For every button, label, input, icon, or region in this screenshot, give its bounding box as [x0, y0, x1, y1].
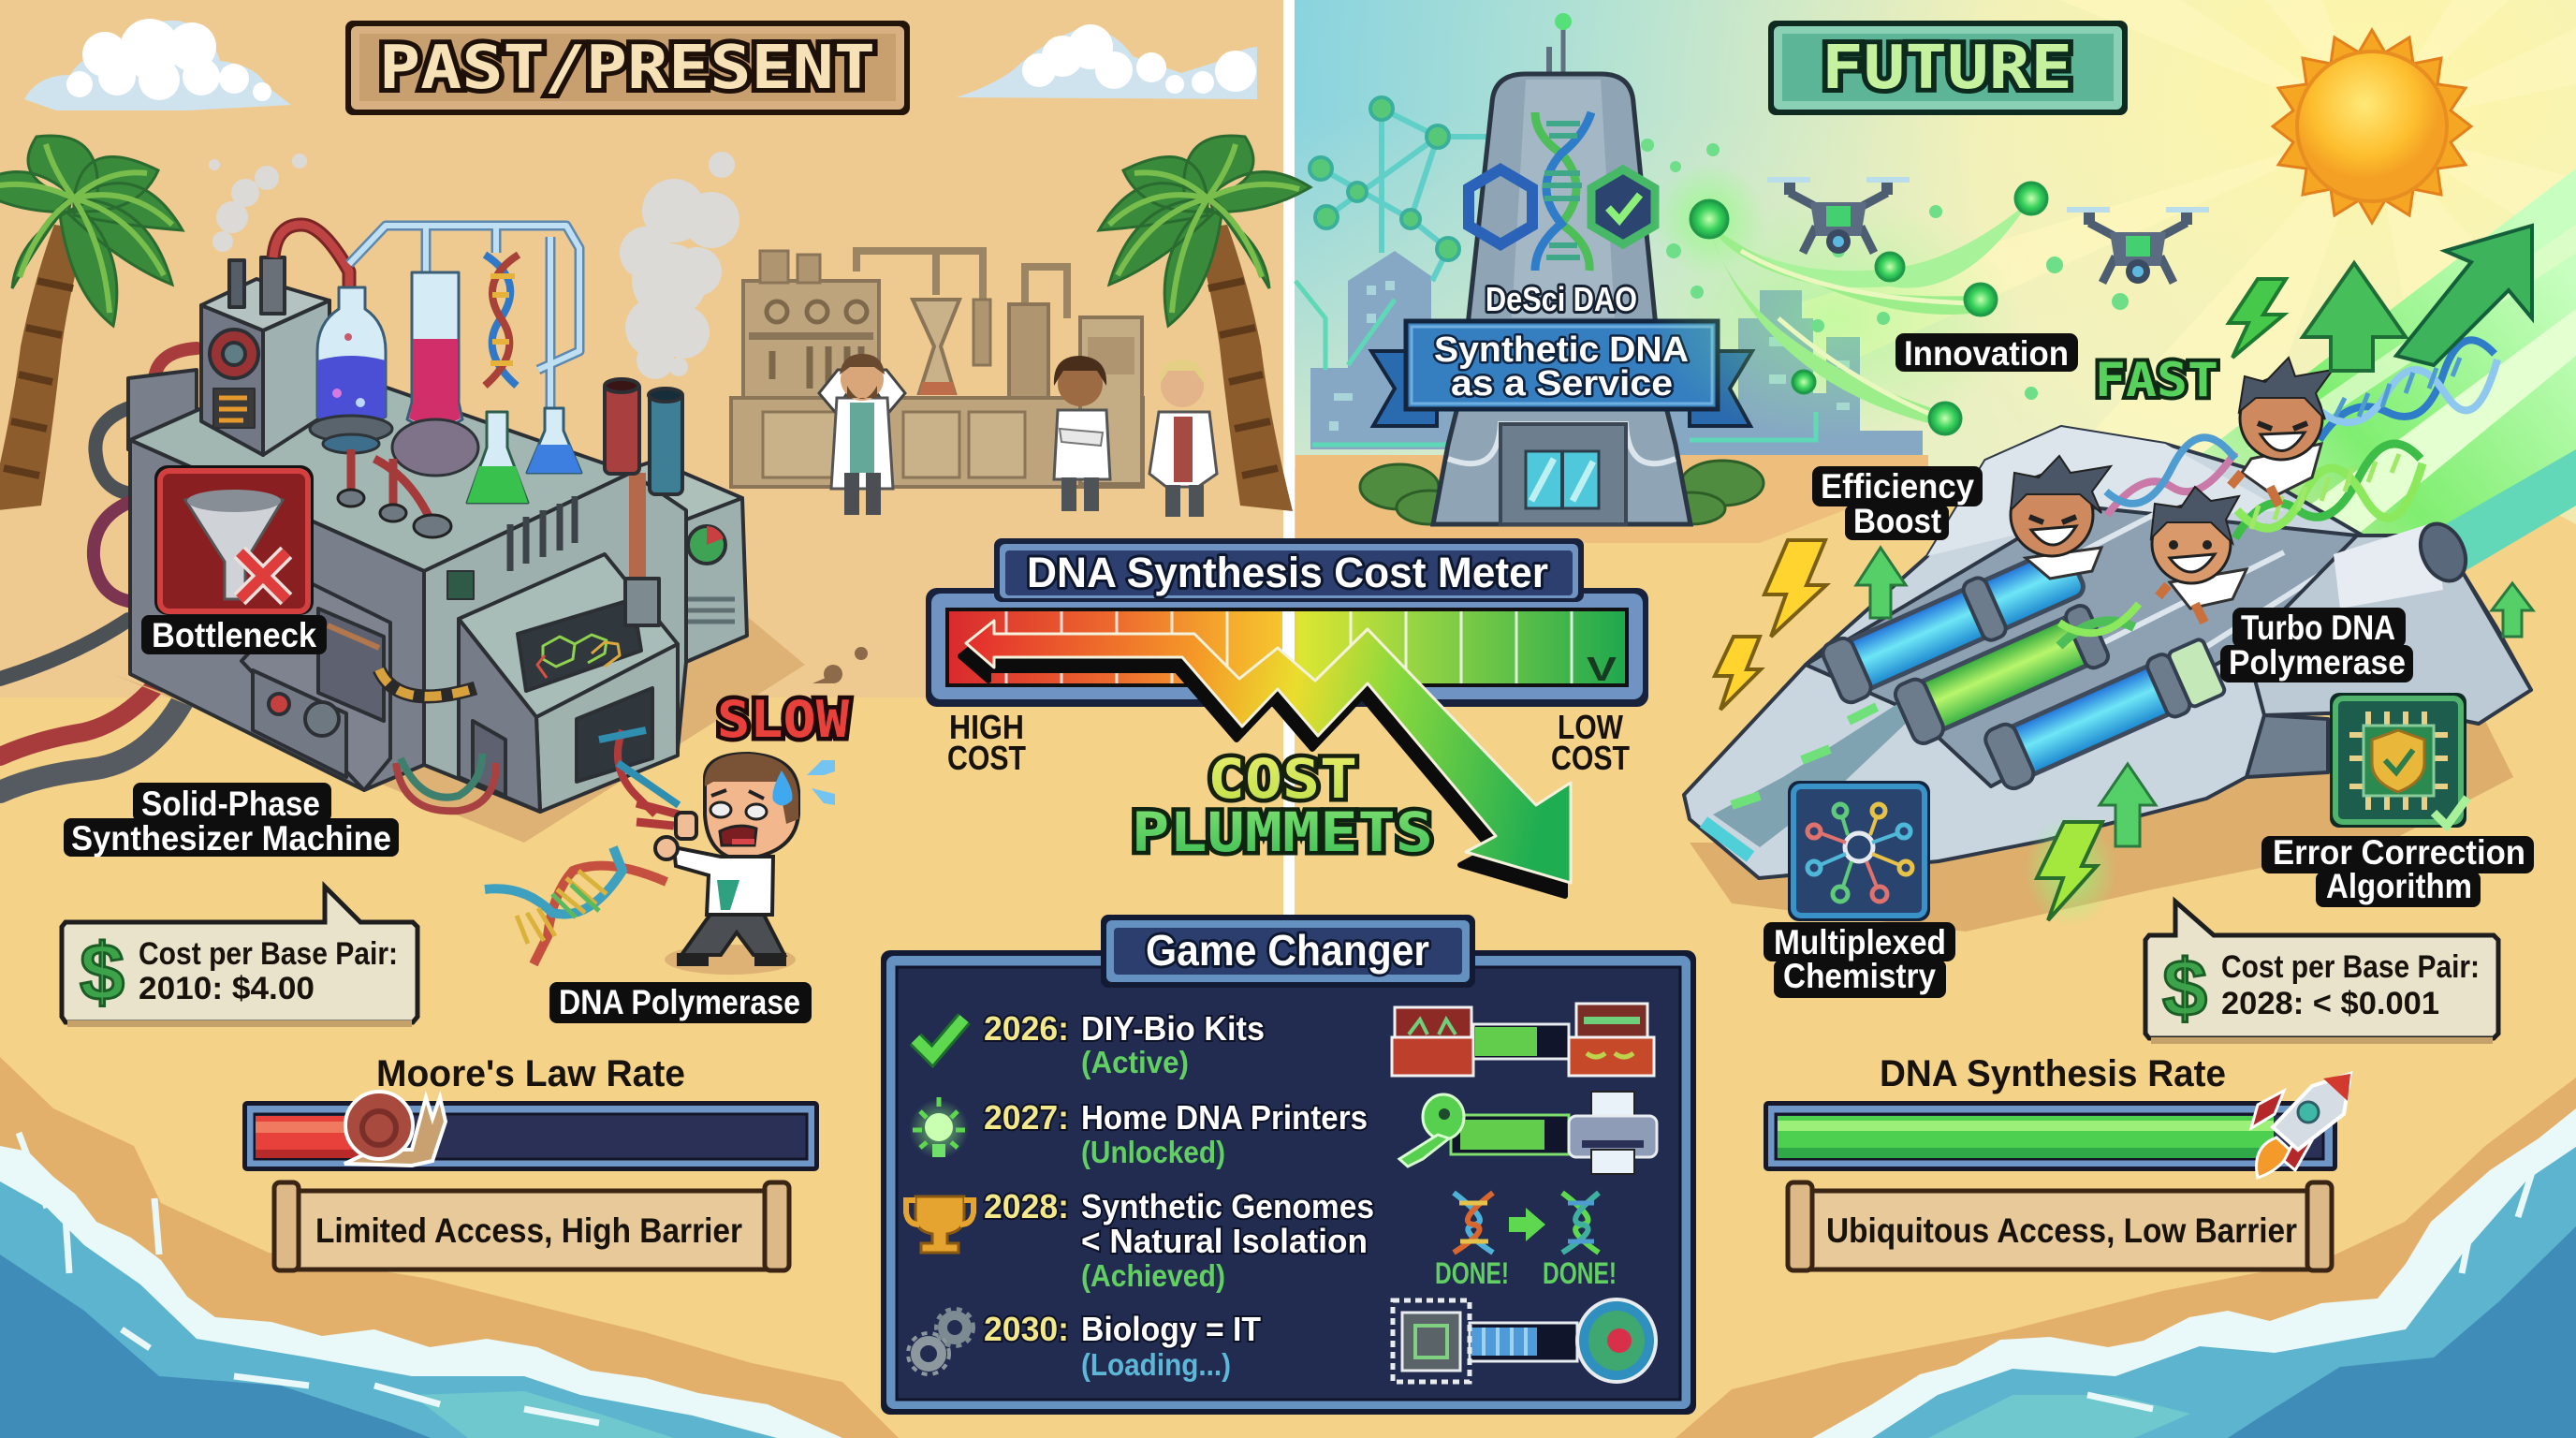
label: Solid-Phase Synthesizer Machine	[64, 783, 399, 858]
bushes	[1360, 461, 1764, 524]
icon: DNA and hexagons on tower	[1469, 112, 1655, 271]
panel: DNA synthesis cost meter	[926, 538, 1648, 707]
palm tree right	[1099, 136, 1310, 511]
scientist hands on head	[819, 354, 905, 515]
row 2026: (Active)	[1081, 1045, 1189, 1079]
heading plate: PAST/PRESENT: PAST/PRESENT	[379, 34, 875, 103]
label: Turbo DNA Polymerase: Turbo DNA	[2241, 609, 2395, 647]
label: LOW COST: COST	[1551, 739, 1630, 777]
row 2027: 2027:	[984, 1098, 1069, 1137]
heading plate: PAST/PRESENT	[345, 21, 910, 115]
label: Solid-Phase Synthesizer Machine: Solid-Phase	[141, 785, 320, 823]
divider between past and future	[1283, 0, 1295, 946]
label: HIGH COST	[947, 708, 1026, 777]
row 2028: Synthetic Genomes	[1081, 1187, 1374, 1225]
label: Multiplexed Chemistry	[1764, 922, 1955, 998]
banner: Synthetic DNA as a Service	[1371, 321, 1752, 426]
DNA strand being dragged	[485, 847, 666, 964]
cloud left	[24, 19, 291, 110]
label: SLOW: SLOW	[717, 690, 850, 749]
background: future sky	[1288, 0, 2576, 1438]
banner: Synthetic DNA as a Service: Synthetic DNA	[1434, 330, 1689, 370]
label: Multiplexed Chemistry: Chemistry	[1783, 957, 1936, 995]
steam clouds	[209, 152, 739, 379]
label: Error Correction Algorithm: Error Correction	[2273, 833, 2525, 872]
scientist arms crossed	[1054, 356, 1110, 511]
icon: error correction chip	[2330, 693, 2467, 828]
data network nodes	[1310, 97, 1488, 281]
icon: multiplexed chemistry	[1788, 781, 1930, 921]
row 2027: Home DNA Printers	[1081, 1098, 1368, 1137]
row 2028: < Natural Isolation	[1081, 1222, 1368, 1260]
scroll: Limited Access, High Barrier: Limited Access, High Barrier	[315, 1211, 742, 1250]
heading: COST PLUMMETS: COST	[1208, 747, 1357, 811]
arrow: plummeting cost	[960, 621, 1571, 896]
city skyline	[1295, 251, 1923, 455]
callout: cost per base pair 2028	[2145, 902, 2498, 1044]
row 2026	[915, 1004, 1654, 1079]
scroll: Ubiquitous Access, Low Barrier: Ubiquitous Access, Low Barrier	[1826, 1211, 2297, 1250]
icon: yellow lightning large	[1764, 540, 1826, 637]
row 2027	[909, 1092, 1657, 1174]
meter tab title	[994, 538, 1584, 602]
callout: cost per base pair 2028: Cost per Base Pair:	[2221, 949, 2480, 985]
banner: Synthetic DNA as a Service: as a Service	[1451, 364, 1673, 404]
tab: Game Changer title	[1101, 915, 1475, 988]
icons: DNA to DNA done	[1454, 1193, 1599, 1253]
scroll: Ubiquitous Access, Low Barrier	[1788, 1182, 2332, 1270]
label: Turbo DNA Polymerase	[2220, 608, 2413, 682]
callout: cost per base pair 2010	[62, 887, 417, 1027]
label: Error Correction Algorithm: Algorithm	[2326, 867, 2472, 905]
callout: cost per base pair 2010: 2010: $4.00	[139, 971, 315, 1006]
progress bar: DNA synthesis rate	[1764, 1101, 2337, 1171]
scared scientist pulling DNA	[637, 754, 835, 975]
background: right shoreline and water	[1676, 1078, 2576, 1438]
background: past sand	[0, 0, 1288, 1438]
icons: chip to cell progress	[1393, 1299, 1656, 1382]
ship tube blue top	[1820, 539, 2089, 706]
progress bar: Moore's Law rate	[242, 1101, 819, 1171]
heading: COST PLUMMETS: PLUMMETS	[1132, 800, 1433, 864]
row 2030: (Loading...)	[1081, 1347, 1231, 1382]
meter scale gradient	[949, 611, 1625, 683]
character: rider back	[2231, 358, 2333, 506]
ship tube green middle	[1892, 603, 2111, 747]
sun	[2273, 30, 2471, 223]
heading plate: FUTURE: FUTURE	[1822, 34, 2072, 103]
wires from machine	[379, 669, 679, 814]
label: Innovation: Innovation	[1904, 334, 2069, 373]
arrow: large green up	[2303, 263, 2406, 371]
label: LOW COST: LOW	[1558, 708, 1623, 746]
palm tree left	[0, 136, 183, 511]
row 2030	[908, 1299, 1656, 1382]
tab: Game Changer title: Game Changer	[1146, 926, 1429, 975]
row 2028: DONE!	[1435, 1256, 1509, 1290]
meter mark V: V	[1587, 650, 1617, 688]
heading plate: FUTURE	[1768, 21, 2128, 115]
cables behind machine	[0, 348, 197, 792]
row 2026: 2026:	[984, 1009, 1069, 1048]
icon: bottleneck funnel	[154, 465, 314, 615]
row 2028: 2028:	[984, 1187, 1069, 1225]
scroll: Limited Access, High Barrier	[274, 1182, 789, 1270]
energy streams and orbs	[1641, 139, 2129, 440]
label: Turbo DNA Polymerase: Polymerase	[2229, 643, 2406, 682]
label: LOW COST	[1551, 708, 1630, 777]
arrow: green up left	[1856, 548, 1906, 618]
character: rider right	[2151, 487, 2247, 623]
small rocks on sand	[812, 647, 868, 683]
row 2030: 2030:	[984, 1310, 1069, 1348]
row 2028: (Achieved)	[1081, 1258, 1225, 1293]
drone left	[1767, 180, 1910, 254]
icon: green lightning top	[2229, 279, 2286, 358]
background lab: shelves and distillation equipment	[731, 251, 1143, 487]
ship tube blue lower	[1982, 637, 2227, 792]
callout: cost per base pair 2010: Cost per Base Pair:	[139, 936, 398, 972]
row 2028	[906, 1187, 1617, 1293]
label: Efficiency Boost: Efficiency	[1821, 467, 1974, 506]
row 2027: (Unlocked)	[1081, 1135, 1225, 1169]
green speed beams	[2097, 169, 2576, 599]
panel: Game Changer	[881, 915, 1696, 1415]
scientist standing	[1149, 360, 1217, 517]
heading: COST PLUMMETS	[1132, 747, 1433, 864]
machine: solid-phase synthesizer	[112, 257, 805, 843]
label: DeSci DAO: DeSci DAO	[1486, 280, 1637, 318]
row 2026: DIY-Bio Kits	[1081, 1009, 1265, 1048]
label: Efficiency Boost	[1812, 466, 1983, 540]
label: Efficiency Boost: Boost	[1853, 502, 1941, 540]
row 2028: DONE!	[1543, 1256, 1617, 1290]
heading: Moore's Law Rate: Moore's Law Rate	[376, 1053, 685, 1094]
callout: cost per base pair 2028: 2028: < $0.001	[2221, 986, 2439, 1021]
label: Bottleneck: Bottleneck	[152, 616, 316, 654]
drone right	[2067, 210, 2209, 284]
arrow: green up right	[2492, 583, 2533, 637]
heading: DNA Synthesis Rate: DNA Synthesis Rate	[1880, 1053, 2226, 1094]
icons: key to printer progress	[1399, 1092, 1657, 1174]
icons: toolbox progress	[1392, 1004, 1654, 1076]
icon: green lightning lower	[2024, 814, 2117, 927]
icon: rocket	[2251, 1074, 2350, 1178]
arrow: green up lower	[2100, 764, 2156, 846]
row 2030: Biology = IT	[1081, 1310, 1261, 1348]
icon: yellow lightning small	[1715, 637, 1761, 710]
label: HIGH COST: HIGH	[949, 708, 1024, 746]
DNA helices streaming from ship	[2059, 340, 2497, 646]
label: Solid-Phase Synthesizer Machine: Synthesizer Machine	[71, 819, 391, 858]
arrow: diagonal green	[2396, 226, 2532, 365]
label: Error Correction Algorithm	[2261, 833, 2534, 907]
cloud right	[957, 24, 1257, 99]
label: Multiplexed Chemistry: Multiplexed	[1774, 923, 1946, 961]
tower: DeSci DAO	[1433, 13, 1690, 524]
label: FAST: FAST	[2095, 353, 2218, 407]
character: rider left	[2011, 456, 2111, 579]
meter tab title: DNA Synthesis Cost Meter	[1027, 549, 1548, 596]
label: HIGH COST: COST	[947, 739, 1026, 777]
glassware: tubes, flasks and DNA helix on machine	[273, 225, 581, 537]
label: DNA Polymerase: DNA Polymerase	[559, 983, 800, 1021]
background: left shoreline and water	[0, 1057, 899, 1438]
spaceship	[1684, 427, 2531, 932]
icon: snail	[344, 1092, 446, 1166]
